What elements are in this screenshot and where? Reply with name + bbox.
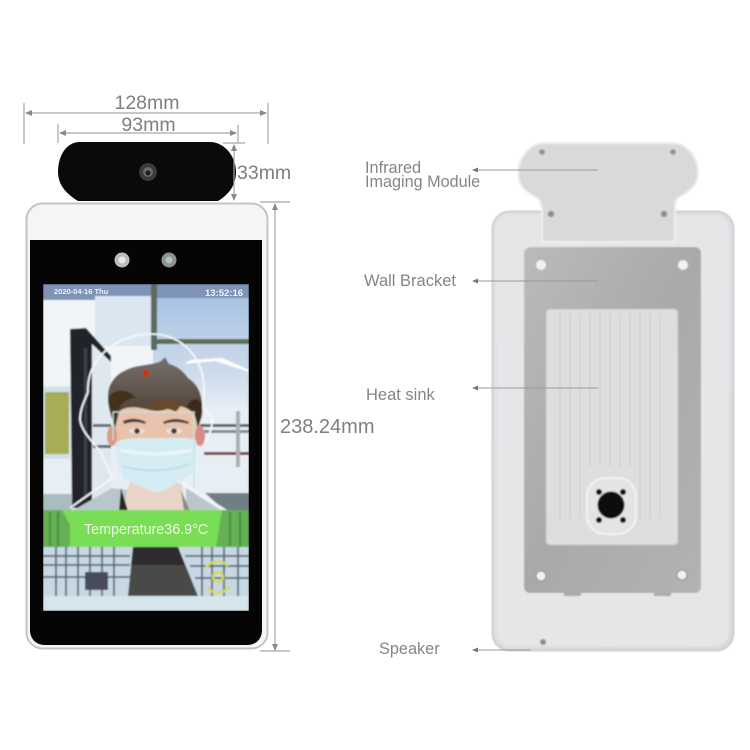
- thermal camera module: [58, 142, 236, 201]
- callout: infrared imaging module: Imaging Module: [365, 173, 480, 191]
- icon: screws: [539, 149, 676, 217]
- icon: bracket holes: [536, 260, 688, 581]
- device body: [26, 204, 268, 648]
- eyes: [123, 419, 146, 424]
- face: [114, 405, 198, 448]
- face box: [113, 412, 194, 488]
- green temperature band background: [43, 510, 249, 547]
- screen: camera view: [43, 284, 249, 611]
- icon: front camera right: [162, 252, 176, 268]
- wall bracket plate: [524, 247, 701, 596]
- callout: speaker: [379, 640, 530, 658]
- callout: wall bracket: Wall Bracket: [364, 272, 456, 290]
- screen date: 2020-04-16 Thu: [54, 287, 109, 296]
- heat sink: [546, 309, 678, 545]
- icon: yellow logo: [206, 562, 230, 593]
- icon: front camera left: [114, 252, 130, 268]
- hair: [108, 357, 202, 428]
- dimension: 93mm width: 93mm: [121, 114, 176, 136]
- screen clock: 13:52:16: [205, 288, 243, 299]
- callout: infrared imaging module: [365, 159, 598, 191]
- panel: front view of device: [26, 142, 268, 648]
- callout: heat sink: [366, 386, 598, 404]
- dimension: 33mm height: [223, 143, 291, 201]
- speaker screw: [540, 639, 546, 645]
- dimension: 33mm height: 33mm: [237, 162, 291, 184]
- icon: thermal lens: [139, 163, 157, 181]
- heat sink fins: [560, 312, 660, 520]
- callout: wall bracket: [364, 272, 598, 290]
- callout: speaker: Speaker: [379, 640, 440, 658]
- dimension: 238.24mm height: [260, 202, 374, 651]
- connector port: [587, 478, 636, 534]
- dimension: 128mm width: 128mm: [114, 92, 180, 114]
- dimension: 93mm width: [58, 114, 238, 143]
- mask: [116, 438, 196, 492]
- shirt: [43, 547, 249, 596]
- temperature spot: [142, 370, 150, 376]
- infrared module back plate: [518, 143, 698, 242]
- callout: infrared imaging module: Infrared: [365, 159, 421, 177]
- callout: heat sink: Heat sink: [366, 386, 436, 404]
- temperature reading: Temperature36.9°C: [84, 522, 208, 538]
- head outline: [70, 334, 212, 508]
- dimension: 238.24mm height: 238.24mm: [280, 416, 374, 438]
- rear housing: [492, 212, 734, 650]
- neck: [122, 480, 184, 511]
- dimension: 128mm width: [24, 92, 268, 144]
- door: [92, 345, 111, 500]
- panel: rear view of device: [492, 143, 734, 650]
